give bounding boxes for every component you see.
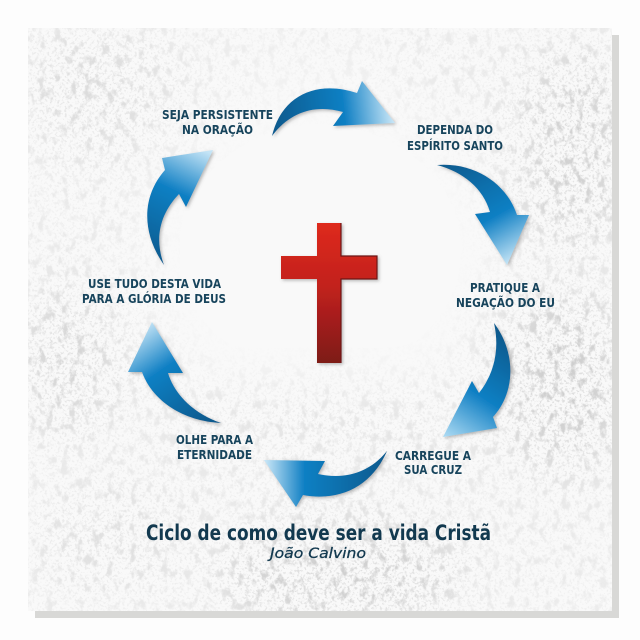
label: seja persistente: SEJA PERSISTENTE — [162, 108, 273, 122]
label: use tudo desta vida: PARA A GLÓRIA DE DEUS — [82, 291, 226, 306]
arrow: negação to cruz — [443, 323, 510, 437]
arrow: cruz to eternidade — [264, 451, 387, 507]
icon: cross — [281, 223, 377, 363]
label: pratique a negação: PRATIQUE A — [470, 281, 541, 295]
label: pratique a negação — [456, 281, 555, 310]
label: use tudo desta vida: USE TUDO DESTA VIDA — [88, 277, 222, 291]
label: olhe para a eternidade: OLHE PARA A — [176, 433, 254, 447]
label: use tudo desta vida — [82, 277, 226, 306]
label: carregue a cruz: SUA CRUZ — [404, 463, 462, 477]
label: pratique a negação: NEGAÇÃO DO EU — [456, 295, 555, 310]
title: Ciclo de como deve ser a vida Cristã — [146, 521, 491, 545]
label: dependa do Espírito Santo: DEPENDA DO — [417, 123, 493, 137]
label: olhe para a eternidade — [176, 433, 254, 462]
arrow: persistente to Espírito Santo — [272, 81, 395, 136]
arrow: glória to persistente — [147, 150, 213, 265]
arrow: Espírito Santo to negação — [437, 165, 529, 265]
label: dependa do Espírito Santo: ESPÍRITO SANTO — [407, 138, 503, 153]
label: seja persistente: NA ORAÇÃO — [182, 122, 253, 137]
subtitle: author: João Calvino — [267, 546, 366, 562]
label: seja persistente — [162, 108, 273, 137]
label: carregue a cruz: CARREGUE A — [395, 449, 472, 463]
label: carregue a cruz — [395, 449, 472, 477]
label: olhe para a eternidade: ETERNIDADE — [177, 448, 252, 462]
label: dependa do Espírito Santo — [407, 123, 503, 153]
arrow: eternidade to glória — [128, 322, 221, 423]
